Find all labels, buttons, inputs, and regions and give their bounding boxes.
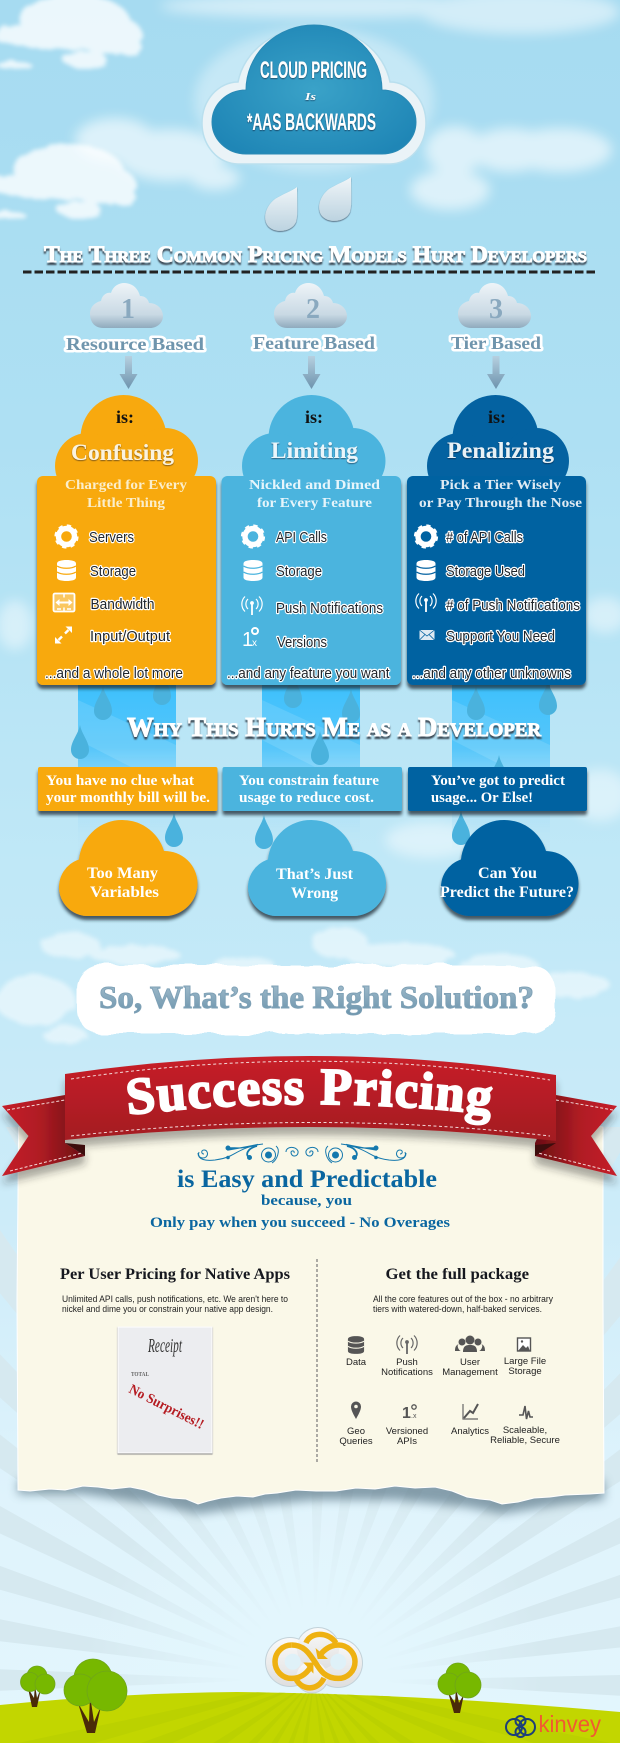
ribbon right tail — [535, 1095, 617, 1176]
cloud: predict the future: Predict the Future? — [440, 884, 574, 901]
cloud group: top left — [0, 0, 143, 69]
heading: three common pricing models: The Three Common Pricing Models Hurt Developers — [44, 242, 587, 267]
tree: large left — [64, 1659, 127, 1733]
feature: large file storage — [504, 1338, 546, 1377]
subheading: Nickled and Dimed — [249, 478, 380, 493]
feature: analytics: Analytics — [451, 1426, 489, 1437]
text: is: is: — [305, 407, 323, 427]
heading: limiting: Limiting — [271, 438, 359, 463]
feature: geo queries — [339, 1402, 373, 1447]
panel: limiting — [222, 395, 401, 685]
icon: push — [242, 596, 262, 615]
subheading — [65, 478, 187, 511]
heading: right solution: So, What’s the Right Solution? — [99, 979, 534, 1015]
panel: paper — [17, 1120, 604, 1504]
sun rays — [0, 1127, 620, 1696]
heading: confusing: Confusing — [71, 440, 175, 465]
arrow — [120, 356, 138, 389]
feature: user management — [442, 1336, 498, 1378]
icon: number cloud 3: 3 — [489, 294, 503, 325]
panel: tier based header — [451, 283, 541, 389]
ribbon centre — [65, 1056, 556, 1141]
column: full package: All the core features out of the box - no arbitrary — [373, 1294, 553, 1305]
feature: large file storage: Large File — [504, 1356, 546, 1367]
icon: storage — [244, 560, 262, 581]
text: is: is: — [116, 407, 134, 427]
cloud — [55, 395, 198, 499]
callout: no clue: You have no clue what — [46, 773, 194, 789]
list: feature items: ...and any feature you want — [227, 665, 390, 682]
subheading: or Pay Through the Nose — [419, 496, 582, 511]
callout: constrain: usage to reduce cost. — [239, 790, 374, 806]
headline: easy and predictable: Only pay when you succeed - No Overages — [150, 1215, 450, 1231]
list: tier items: Storage Used — [446, 563, 525, 580]
list: resource items: Bandwidth — [90, 596, 154, 613]
icon: storage — [416, 560, 436, 581]
logo: infinity cloud — [265, 1627, 363, 1694]
tree: small left — [20, 1666, 55, 1707]
feature: versioned apis: 1 — [402, 1405, 411, 1422]
subheading — [419, 478, 582, 511]
callout: predict: usage... Or Else! — [431, 790, 533, 806]
list: resource items: Input/Output — [90, 628, 171, 645]
icon: versions: 1 — [242, 629, 253, 651]
heading: why this hurts: Why This Hurts Me as a Developer — [127, 712, 541, 742]
logo: kinvey: kinvey — [538, 1711, 601, 1737]
list: feature items: Versions — [277, 634, 327, 651]
icon: input output — [55, 626, 72, 644]
feature: push notifications — [381, 1336, 433, 1378]
list: feature items: Storage — [276, 563, 322, 580]
cloud: predict the future — [440, 820, 579, 916]
cloud: that's just wrong: Wrong — [291, 885, 338, 902]
list: feature items — [227, 526, 390, 682]
cloud — [242, 395, 386, 499]
headline: easy and predictable: is Easy and Predictable — [177, 1166, 437, 1193]
receipt: TOTAL — [131, 1372, 149, 1378]
column: per user pricing — [60, 1266, 290, 1453]
column: per user pricing: Unlimited API calls, push notifications, etc. We aren't here to — [62, 1294, 288, 1305]
title text — [247, 57, 376, 136]
column: per user pricing: nickel and dime you or constrain your native app design. — [62, 1304, 273, 1315]
list: tier items — [412, 526, 580, 682]
title text: CLOUD PRICING — [260, 57, 367, 84]
feature: scaleable: Scaleable, — [503, 1425, 547, 1436]
column: full package — [339, 1266, 560, 1447]
box — [222, 476, 401, 685]
ribbon left tail — [2, 1095, 85, 1176]
blue light columns — [78, 680, 550, 850]
banner: success pricing — [0, 1056, 619, 1188]
receipt — [118, 1327, 212, 1453]
feature: data: Data — [346, 1357, 367, 1368]
list: resource items — [45, 526, 183, 682]
background clouds — [0, 0, 620, 1044]
feature: push notifications: Notifications — [381, 1367, 433, 1378]
subheading: Pick a Tier Wisely — [440, 478, 561, 493]
logo: kinvey — [506, 1711, 601, 1737]
icon: gear — [415, 526, 437, 547]
label: feature based: Feature Based — [253, 333, 375, 353]
icon: versions: x — [252, 638, 257, 649]
feature: versioned apis: Versioned — [386, 1426, 428, 1437]
list: resource items: Storage — [90, 563, 136, 580]
feature: geo queries: Geo — [347, 1426, 365, 1437]
cloud: predict the future: Can You — [478, 865, 537, 882]
callout: constrain: You constrain feature — [239, 773, 379, 789]
icon: title rain drops — [265, 177, 351, 231]
box — [37, 476, 216, 685]
heading: success pricing: Success Pricing — [127, 1068, 493, 1126]
list: resource items: Servers — [89, 529, 134, 546]
callout: no clue — [38, 767, 218, 811]
panel: right solution — [77, 965, 555, 1034]
headline: easy and predictable: because, you — [261, 1193, 352, 1209]
feature: push notifications: Push — [396, 1357, 418, 1368]
callout: predict — [408, 767, 587, 811]
panel: resource based header — [66, 283, 204, 389]
cloud: too many variables: Variables — [90, 884, 159, 901]
arrow — [487, 356, 505, 389]
icon: versions — [242, 628, 258, 651]
callout: constrain — [222, 767, 402, 811]
cloud: that's just wrong — [248, 820, 386, 916]
icon: push — [416, 594, 436, 612]
cloud: too many variables: Too Many — [87, 865, 158, 882]
callout: predict: You’ve got to predict — [431, 773, 565, 789]
feature: versioned apis: .x — [411, 1413, 417, 1420]
box — [407, 476, 586, 685]
paper shadow — [18, 1480, 604, 1514]
list: resource items: ...and a whole lot more — [45, 665, 183, 682]
feature: user management: Management — [442, 1367, 498, 1378]
label: resource based: Resource Based — [66, 334, 204, 354]
feature: scaleable: Reliable, Secure — [490, 1435, 560, 1446]
grass hill — [0, 1692, 620, 1743]
headline: easy and predictable — [150, 1166, 450, 1231]
feature: scaleable — [490, 1406, 560, 1446]
icon: number cloud 1: 1 — [121, 294, 135, 325]
subheading: Charged for Every — [65, 478, 187, 493]
icon: storage — [57, 560, 76, 581]
icon: number cloud 2: 2 — [306, 294, 320, 325]
feature: data — [346, 1336, 367, 1368]
list: feature items: API Calls — [276, 529, 327, 546]
feature: analytics — [451, 1404, 489, 1437]
callout: no clue: your monthly bill will be. — [46, 790, 210, 806]
column: full package: Get the full package — [386, 1266, 529, 1283]
panel: feature based header — [253, 283, 375, 389]
icon: gear — [242, 526, 264, 547]
column: full package: tiers with watered-down, half-baked services. — [373, 1304, 542, 1315]
rain drops behind boxes — [71, 671, 557, 849]
tree: right — [438, 1663, 481, 1713]
list: tier items: Support You Need — [446, 628, 555, 645]
feature: geo queries: Queries — [339, 1436, 373, 1447]
heading: penalizing: Penalizing — [447, 438, 555, 463]
text: is: is: — [488, 407, 506, 427]
arrow — [302, 356, 320, 389]
title text: *AAS BACKWARDS — [247, 109, 376, 136]
column: per user pricing: Per User Pricing for Native Apps — [60, 1266, 290, 1283]
feature: large file storage: Storage — [508, 1366, 542, 1377]
list: feature items: Push Notifications — [276, 600, 383, 617]
list: tier items: ...and any other unknowns — [412, 665, 571, 682]
panel: penalizing — [407, 395, 586, 685]
cloud: that's just wrong: That’s Just — [276, 866, 354, 883]
feature: versioned apis: APIs — [397, 1436, 417, 1447]
cloud — [427, 395, 569, 499]
feature: user management: User — [460, 1357, 480, 1368]
subheading: Little Thing — [87, 496, 165, 511]
cloud group: middle left — [0, 144, 137, 219]
list: tier items: # of Push Notifications — [446, 597, 580, 614]
panel: confusing — [37, 395, 216, 685]
icon: gear — [56, 526, 77, 547]
title cloud — [194, 25, 434, 172]
cloud: too many variables — [59, 820, 198, 916]
label: tier based: Tier Based — [451, 333, 541, 353]
ornament — [198, 1144, 406, 1163]
receipt: No Surprises!! — [126, 1382, 206, 1433]
feature: versioned apis — [386, 1405, 428, 1447]
receipt: Receipt — [147, 1335, 182, 1357]
subheading: for Every Feature — [257, 496, 372, 511]
title text: Is — [304, 92, 316, 103]
list: tier items: # of API Calls — [446, 529, 523, 546]
icon: envelope — [420, 630, 434, 640]
icon: bandwidth — [54, 594, 74, 612]
subheading — [249, 478, 380, 511]
